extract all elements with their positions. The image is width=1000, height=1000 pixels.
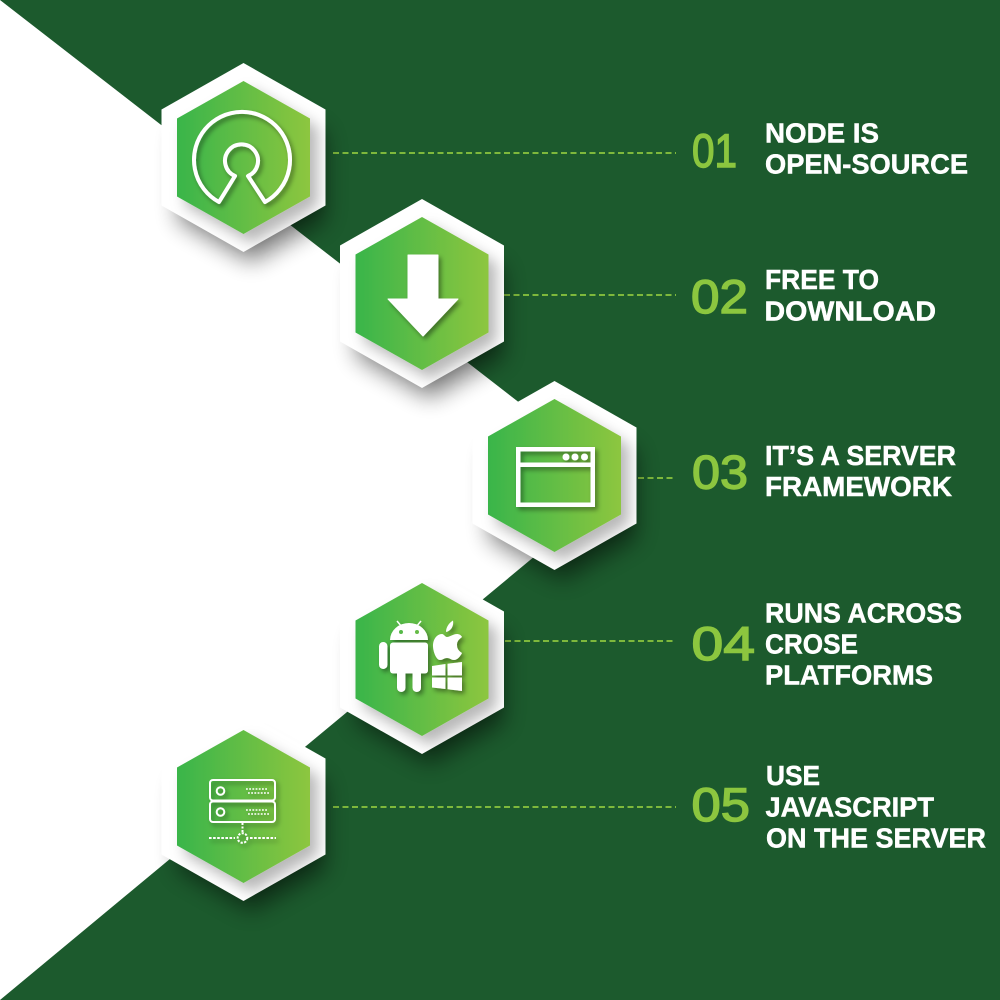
connector line 03 [638,477,676,479]
label: use javascript on the server: JAVASCRIPT [766,792,934,822]
hexagon face [177,81,310,234]
label: node is open-source: OPEN-SOURCE [765,148,968,180]
label: node is open-source: NODE IS [765,118,879,148]
label: free to download [764,264,936,326]
hexagon 1: open source [162,63,326,263]
item 05 [692,760,986,854]
icon: download arrow [388,255,458,336]
label: runs across crose platforms: RUNS ACROSS [765,598,962,628]
hexagon plate [340,199,504,388]
hexagon face [177,730,310,883]
label: runs across crose platforms: CROSE [765,628,858,660]
item 03 [692,440,956,502]
item 04 [692,598,962,690]
hexagon plate [162,63,326,252]
connector line 04 [505,640,676,642]
icon: android, apple and windows logos [379,620,462,692]
icon: browser window [516,447,595,507]
icon: server network [209,780,276,843]
label: it's a server framework: FRAMEWORK [765,471,952,502]
hexagon 3: server framework [472,381,636,581]
label: free to download: FREE TO [765,264,879,295]
item 01 [692,118,968,180]
label: use javascript on the server [766,760,986,854]
hexagon face [488,399,621,552]
number 04: 04 [692,617,755,670]
hexagon 2: download [340,199,504,399]
number 02: 02 [691,270,748,323]
white arrow-shaped area [0,0,623,1000]
hexagon plate [472,381,636,570]
hexagon 5: javascript on the server [162,712,326,912]
icon: open source keyhole [194,112,290,202]
number 03: 03 [692,446,748,498]
label: node is open-source [765,118,968,180]
number 05: 05 [692,778,750,831]
label: it's a server framework: IT’S A SERVER [765,440,956,471]
label: free to download: DOWNLOAD [764,296,936,326]
item 02 [691,264,936,326]
number 01: 01 [692,124,737,177]
connector line 05 [333,806,676,808]
label: use javascript on the server: USE [766,760,820,791]
label: use javascript on the server: ON THE SERVER [766,822,986,854]
hexagon plate [162,712,326,901]
connector line 02 [504,294,676,296]
label: it's a server framework [765,440,956,502]
label: runs across crose platforms: PLATFORMS [765,660,933,690]
hexagon 4: cross platform [340,565,504,765]
hexagon face [356,583,488,736]
hexagon plate [340,565,504,754]
label: runs across crose platforms [765,598,962,690]
connector line 01 [333,152,676,154]
hexagon face [356,217,488,370]
